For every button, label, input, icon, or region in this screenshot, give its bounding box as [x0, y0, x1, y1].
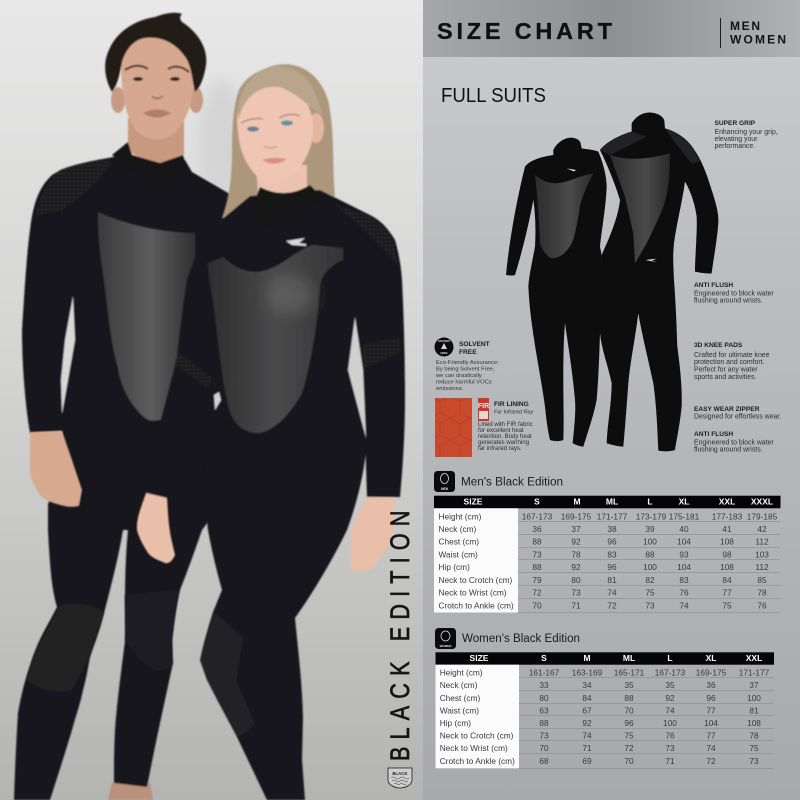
men's row: neck to crotch [438, 575, 767, 585]
text: FIR lining: retention. Body heat [478, 434, 532, 440]
text: FIR lining [478, 401, 534, 452]
heading: men's table: Men's Black Edition [461, 476, 563, 488]
heading: FULL SUITS: FULL SUITS [441, 85, 546, 107]
text: solvent free: FREE [459, 349, 477, 356]
text: solvent free: emissions. [436, 386, 464, 392]
men's row: height: 179-185 [747, 512, 778, 522]
women's row: hip: 108 [747, 718, 761, 728]
text: FIR lining: Lined with FIR fabric [478, 422, 533, 428]
women's row: crotch to ankle [440, 756, 759, 766]
callout: easy wear zipper: Designed for effortless wear. [694, 414, 781, 420]
men's row: neck: 36 [532, 524, 542, 534]
men's row: chest [438, 537, 769, 547]
women's row: neck to crotch: Neck to Crotch (cm) [440, 731, 514, 741]
woman's neck [256, 165, 307, 195]
women's row: neck: 36 [706, 680, 716, 690]
callout: anti flush ankle: flushing around wrists. [694, 446, 763, 454]
men's row: height: 173-179 [636, 512, 667, 522]
women's row: neck: 37 [749, 680, 759, 690]
men's row: crotch to ankle: 76 [757, 600, 767, 610]
men's row: crotch to ankle: Crotch to Ankle (cm) [438, 600, 514, 610]
men's header row: XXXL [751, 497, 773, 507]
men's row: crotch to ankle: 74 [679, 600, 689, 610]
man's chest panel [98, 212, 195, 421]
product image: wetsuits [506, 112, 718, 451]
men's row: neck: 37 [571, 524, 581, 534]
women's row: hip: 104 [704, 718, 718, 728]
women's header row: XXL [746, 653, 762, 663]
men's row: height [438, 512, 778, 522]
men's row: neck to wrist: 73 [571, 588, 581, 598]
callout: anti flush: flushing around wrists. [694, 298, 763, 304]
women's row: hip: 92 [582, 718, 592, 728]
women's row lines [519, 678, 774, 768]
men's row: crotch to ankle: 71 [571, 600, 581, 610]
women's row: height: 171-177 [739, 668, 770, 678]
men's row: hip: 100 [643, 562, 657, 572]
men's row: hip: 112 [755, 562, 769, 572]
men's row: waist: 93 [679, 549, 689, 559]
text: solvent free: Eco-Friendly Assurance: [436, 360, 499, 366]
panel: model photo [0, 0, 423, 800]
men's row: waist: 78 [571, 549, 581, 559]
women's header row: S [541, 653, 547, 663]
text: FIR lining: FIR LINING [494, 401, 529, 408]
women's row: neck to crotch: 73 [539, 731, 549, 741]
men's row: neck to crotch: 84 [722, 575, 732, 585]
heading: BLACK EDITION: BLACK EDITION [386, 511, 416, 761]
icon: FIR logo: FIR [478, 403, 489, 410]
men's row: neck to crotch: 79 [532, 575, 542, 585]
men's row: height: 175-181 [669, 512, 700, 522]
panel: size chart [423, 0, 800, 800]
women's row: chest: 80 [539, 693, 549, 703]
men's row: crotch to ankle: 70 [532, 600, 542, 610]
man's neck [128, 118, 184, 165]
divider and gender labels: MEN [730, 19, 760, 33]
man's hand [30, 431, 82, 507]
callout: 3d knee pads [694, 342, 770, 381]
men's row: neck to wrist: 72 [532, 588, 542, 598]
women's row: neck to crotch [440, 731, 759, 741]
women's row: neck to wrist [440, 743, 759, 753]
icon: men [434, 471, 455, 492]
wall shadow behind models [200, 80, 244, 200]
text: solvent free [435, 341, 499, 392]
woman's knee pad [200, 612, 255, 737]
men's header row: S [534, 497, 540, 507]
icon: solvent free badge [434, 338, 454, 356]
men's row: crotch to ankle: 73 [645, 600, 655, 610]
heading: women's table: Women's Black Edition [462, 633, 580, 645]
women's row: height: 161-167 [529, 668, 560, 678]
women's row: neck to wrist: Neck to Wrist (cm) [440, 743, 508, 753]
icon: FIR logo [478, 398, 489, 421]
divider and gender labels [720, 18, 786, 48]
woman's chest panel [208, 245, 343, 433]
women's header row: M [583, 653, 591, 663]
women's row: neck to wrist: 74 [706, 743, 716, 753]
men's row: neck to crotch: 82 [645, 575, 655, 585]
callout: easy wear zipper: EASY WEAR ZIPPER [694, 406, 760, 413]
men's row: waist: Waist (cm) [438, 549, 478, 559]
women's row: neck to wrist: 71 [582, 743, 592, 753]
men's row: neck to wrist: Neck to Wrist (cm) [438, 588, 507, 598]
man's wetsuit [14, 156, 240, 800]
men's row: height: 169-175 [561, 512, 592, 522]
women's header row: L [667, 653, 673, 663]
men's row: crotch to ankle [438, 600, 767, 610]
man's knee pads [27, 590, 178, 692]
women's row: neck: Neck (cm) [440, 680, 478, 690]
women's row: chest: 88 [624, 693, 634, 703]
icon: solvent free badge: SOLVENT [438, 339, 450, 343]
icon: men: MEN [441, 487, 449, 491]
women's row: chest: 96 [706, 693, 716, 703]
man's shoulder texture [36, 161, 112, 215]
women's row: hip: 88 [539, 718, 549, 728]
woman's wetsuit [146, 190, 405, 800]
men's header row: ML [606, 497, 618, 507]
men's row: neck: 41 [722, 524, 732, 534]
men's row: neck: 40 [679, 524, 689, 534]
callout: anti flush: ANTI FLUSH [694, 282, 733, 289]
men's row: neck: Neck (cm) [438, 524, 477, 534]
woman's wrist texture [362, 337, 401, 368]
women's row: hip: 100 [663, 718, 677, 728]
text: solvent free: reduce harmful VOCs [436, 380, 492, 386]
women's row: neck: 34 [582, 680, 592, 690]
gap near woman's waist [214, 392, 221, 410]
women's row: neck to crotch: 76 [665, 731, 675, 741]
callout: anti flush: Engineered to block water [694, 290, 774, 298]
men's row: neck to wrist: 76 [679, 588, 689, 598]
men's row: neck to wrist: 78 [757, 588, 767, 598]
men's row: neck to crotch: 85 [757, 575, 767, 585]
men's row: chest: 104 [677, 537, 691, 547]
icon: black shield logo: BLACK [392, 771, 409, 776]
women's row: neck [440, 680, 759, 690]
women's row: chest [440, 693, 761, 703]
callout: anti flush ankle: Engineered to block water [694, 440, 774, 446]
men's suit [600, 112, 718, 451]
callout: 3d knee pads: Crafted for ultimate knee [694, 352, 770, 359]
text: solvent free: we can drastically [435, 373, 482, 379]
men's row: height: 167-173 [522, 512, 553, 522]
men's row lines [518, 522, 780, 612]
women's row: crotch to ankle: 73 [749, 756, 759, 766]
callout: anti flush [694, 282, 774, 304]
divider and gender labels: WOMEN [730, 32, 786, 46]
icon: solvent free badge: FREE [441, 351, 448, 355]
men's row: neck: 42 [757, 524, 767, 534]
women's header row: XL [706, 653, 716, 663]
women's row: chest: 84 [582, 693, 592, 703]
women's row: height: 163-169 [572, 668, 603, 678]
men's row: waist [438, 549, 769, 559]
men's row: hip: Hip (cm) [438, 562, 470, 572]
men's header row: L [647, 497, 653, 507]
woman's head [237, 66, 324, 183]
men's label column [434, 508, 518, 612]
women's row: waist: 70 [624, 706, 634, 716]
women's label column [436, 665, 519, 768]
men's row: neck to wrist: 77 [722, 588, 732, 598]
text: FIR lining: for excellent heat [478, 428, 524, 434]
women's row: neck: 35 [665, 680, 675, 690]
women's row: crotch to ankle: 69 [582, 756, 592, 766]
men's row: hip: 104 [677, 562, 691, 572]
women's row: chest: Chest (cm) [440, 693, 481, 703]
woman's chest highlight [266, 275, 314, 315]
men's row: neck to wrist: 74 [607, 588, 617, 598]
men's header row: XL [679, 497, 689, 507]
callout: anti flush ankle [694, 431, 774, 454]
men's row: waist: 73 [532, 549, 542, 559]
men's row: hip: 88 [532, 562, 542, 572]
model: man [14, 13, 240, 800]
women's row: hip: 96 [624, 718, 634, 728]
women's row: neck: 33 [539, 680, 549, 690]
women's row: neck to wrist: 70 [539, 743, 549, 753]
men's row: neck [438, 524, 767, 534]
men's row: neck to crotch: 81 [607, 575, 617, 585]
women's row: waist: 74 [665, 706, 675, 716]
callout: 3d knee pads: sports and activities. [694, 374, 757, 381]
men's row: waist: 103 [755, 549, 769, 559]
men's header row: SIZE [464, 497, 483, 507]
men's header row: M [573, 497, 581, 507]
women's row: waist [440, 706, 759, 716]
men's row: neck to crotch: Neck to Crotch (cm) [438, 575, 512, 585]
women's row: neck to wrist: 75 [749, 743, 759, 753]
men's row: neck: 38 [607, 524, 617, 534]
women's row: crotch to ankle: 71 [665, 756, 675, 766]
women's header row [436, 652, 774, 665]
man's head [105, 13, 206, 140]
callout: 3d knee pads: 3D KNEE PADS [694, 342, 743, 349]
woman's shoulder texture [335, 205, 398, 265]
text: FIR lining: generates warming [478, 440, 529, 446]
women's row: chest: 100 [747, 693, 761, 703]
women's row: height: Height (cm) [440, 668, 483, 678]
men's row: waist: 98 [722, 549, 732, 559]
men's row: chest: 96 [607, 537, 617, 547]
men's row: hip: 108 [720, 562, 734, 572]
woman's collar [250, 185, 323, 227]
callout: easy wear zipper [694, 406, 781, 420]
title: SIZE CHART: SIZE CHART [437, 18, 613, 44]
gap between woman's arm and torso [348, 317, 366, 438]
men's row: chest: Chest (cm) [438, 537, 479, 547]
men's row: neck to crotch: 83 [679, 575, 689, 585]
table: men's sizes [434, 496, 780, 612]
callout: super grip: SUPER GRIP [714, 120, 756, 127]
women's row: neck to crotch: 77 [706, 731, 716, 741]
men's row: chest: 88 [532, 537, 542, 547]
men's row: neck to wrist [438, 588, 767, 598]
men's row: chest: 100 [643, 537, 657, 547]
men's row: waist: 88 [645, 549, 655, 559]
women's row: hip [440, 718, 761, 728]
women's row: waist: 81 [749, 706, 759, 716]
women's row: waist: 67 [582, 706, 592, 716]
model: woman [137, 64, 405, 800]
men's row: chest: 92 [571, 537, 581, 547]
header band [423, 0, 800, 57]
women's row: neck to wrist: 72 [624, 743, 634, 753]
men's row: height: 177-183 [712, 512, 743, 522]
women's row: crotch to ankle: 68 [539, 756, 549, 766]
women's row: neck to wrist: 73 [665, 743, 675, 753]
icon: women: WOMEN [440, 644, 451, 648]
text: solvent free: By being Solvent Free, [436, 366, 495, 372]
woman's hair back [222, 64, 335, 218]
women's row: neck to crotch: 74 [582, 731, 592, 741]
men's row: neck to wrist: 75 [645, 588, 655, 598]
man's feet [108, 782, 153, 800]
women's row: height: 169-175 [696, 668, 727, 678]
women's row: crotch to ankle: 72 [706, 756, 716, 766]
callout: super grip: performance. [714, 143, 755, 150]
callout: super grip: Enhancing your grip, [714, 129, 778, 136]
text: solvent free: SOLVENT [459, 341, 490, 348]
gap between man's arm and body [61, 296, 75, 414]
women's header row: ML [623, 653, 635, 663]
women's row: crotch to ankle: 70 [624, 756, 634, 766]
women's row: neck to crotch: 78 [749, 731, 759, 741]
women's row: neck to crotch: 75 [624, 731, 634, 741]
callout: anti flush ankle: ANTI FLUSH [694, 431, 733, 438]
women's row: hip: Hip (cm) [440, 718, 471, 728]
men's header row: XXL [719, 497, 735, 507]
callout: 3d knee pads: protection and comfort. [694, 359, 765, 366]
men's row: crotch to ankle: 72 [607, 600, 617, 610]
men's row: chest: 108 [720, 537, 734, 547]
women's row: waist: 63 [539, 706, 549, 716]
men's row: hip: 92 [571, 562, 581, 572]
women's row: chest: 92 [665, 693, 675, 703]
icon: women [435, 628, 456, 649]
men's row: neck to crotch: 80 [571, 575, 581, 585]
callout: super grip [714, 120, 778, 150]
men's row: crotch to ankle: 75 [722, 600, 732, 610]
men's header row [434, 496, 780, 508]
callout: 3d knee pads: Perfect for any water [694, 366, 758, 374]
women's row: neck: 35 [624, 680, 634, 690]
men's row: neck: 39 [645, 524, 655, 534]
woman's hands [137, 493, 395, 572]
woman's arm texture [175, 352, 213, 388]
women's suit [506, 138, 607, 447]
icon: black shield logo [388, 768, 412, 788]
woman's chest logo [286, 238, 306, 246]
callout: super grip: elevating your [714, 136, 758, 143]
swatch: FIR lining fabric [435, 398, 472, 457]
men's row: waist: 83 [607, 549, 617, 559]
women's row: crotch to ankle: Crotch to Ankle (cm) [440, 756, 515, 766]
text: FIR lining: Far Infrared Ray [494, 410, 534, 416]
text: FIR lining: far infrared rays. [478, 446, 522, 452]
women's row: height: 165-171 [614, 668, 645, 678]
men's row: hip [438, 562, 769, 572]
men's row: height: 171-177 [597, 512, 628, 522]
men's row: height: Height (cm) [438, 512, 482, 522]
women's header row: SIZE [470, 653, 489, 663]
table: women's sizes [436, 652, 774, 768]
men's row: hip: 96 [607, 562, 617, 572]
women's row: height [440, 668, 770, 678]
women's row: height: 167-173 [655, 668, 686, 678]
man's collar [112, 142, 188, 187]
men's row: chest: 112 [755, 537, 769, 547]
women's row: waist: Waist (cm) [440, 706, 479, 716]
women's row: waist: 77 [706, 706, 716, 716]
